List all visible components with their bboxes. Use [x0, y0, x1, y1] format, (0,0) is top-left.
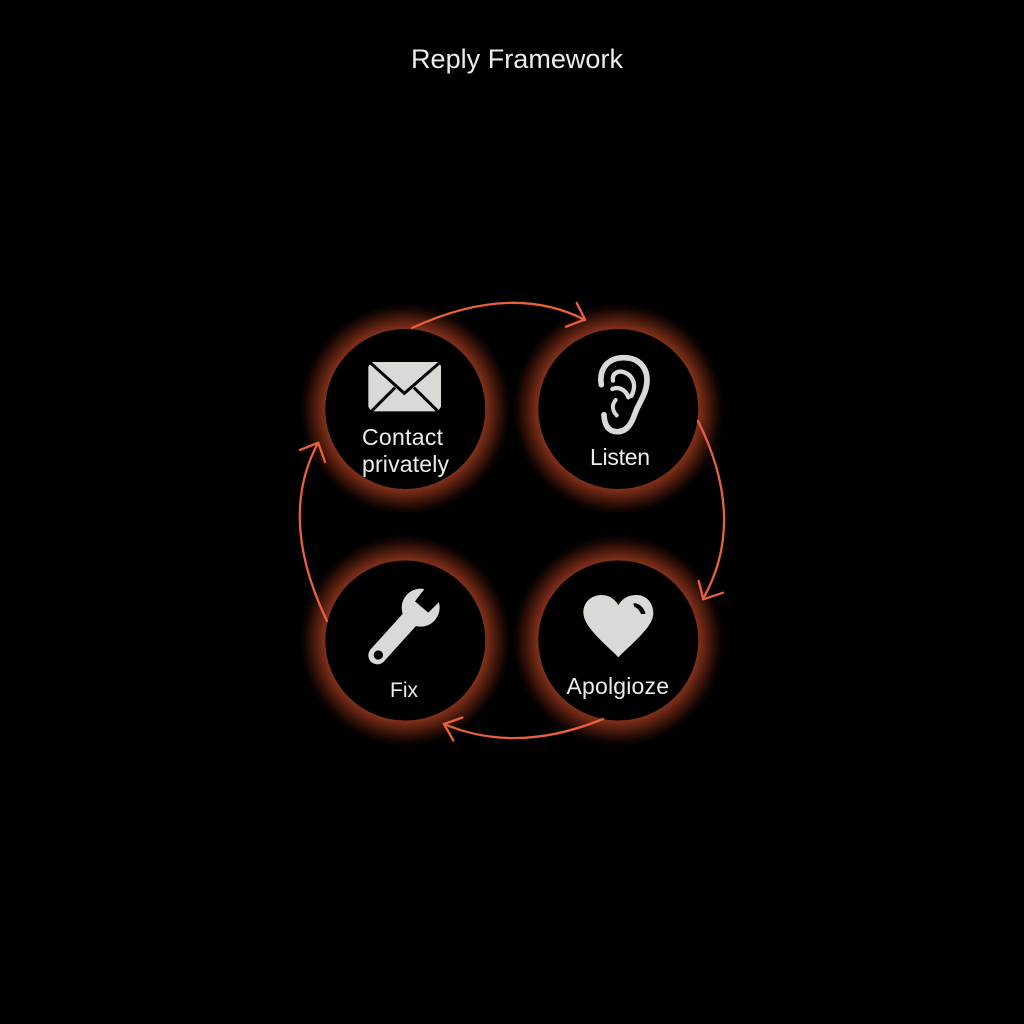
glow ring: fix	[299, 534, 511, 746]
node: listen	[512, 303, 724, 515]
glow ring: contact privately	[299, 303, 511, 515]
disc: listen	[538, 329, 698, 489]
icon: ear	[601, 358, 647, 432]
arrow: listen to apologize	[698, 421, 724, 599]
icon: wrench	[374, 586, 443, 660]
arrow: apologize to fix	[444, 718, 603, 740]
disc: contact privately	[325, 329, 485, 489]
node: contact privately	[299, 303, 511, 515]
label: contact privately: privately	[362, 451, 450, 477]
disc: apologize	[538, 560, 698, 720]
label: contact privately: Contact	[362, 424, 444, 450]
disc: fix	[325, 560, 485, 720]
glow ring: apologize	[512, 534, 724, 746]
arrow: contact to listen	[412, 303, 585, 328]
icon: envelope	[368, 361, 442, 413]
label: listen: Listen	[590, 444, 650, 470]
icon: heart	[583, 595, 653, 657]
label: apologize: Apolgioze	[566, 673, 669, 699]
node: apologize	[512, 534, 724, 746]
glow ring: listen	[512, 303, 724, 515]
arrow: fix to contact	[300, 443, 327, 621]
node: fix	[299, 534, 511, 746]
title: Reply Framework	[411, 44, 624, 74]
label: fix: Fix	[390, 679, 418, 702]
